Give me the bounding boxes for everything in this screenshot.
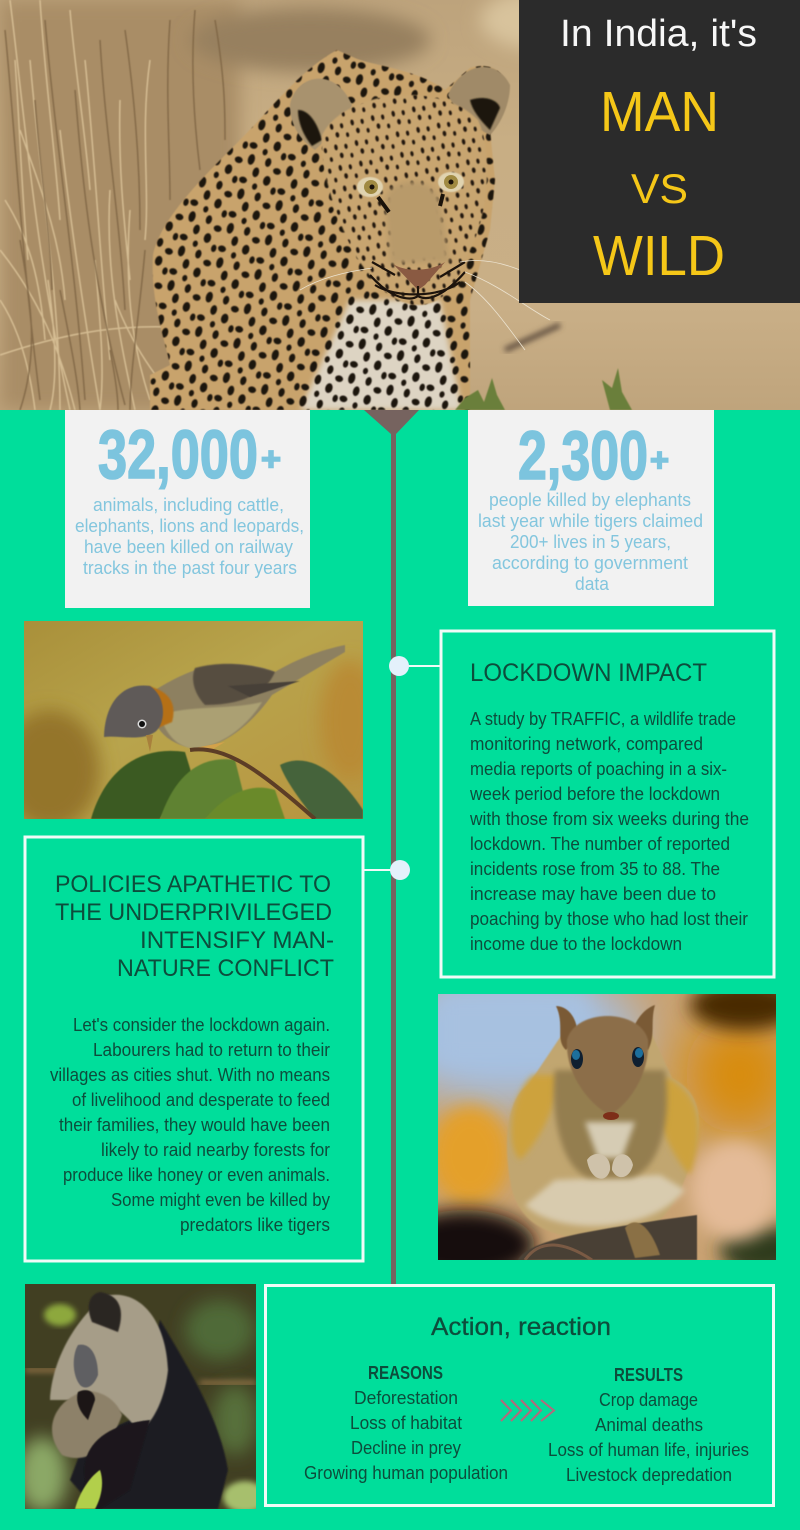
column: reasons: Decline in prey — [351, 1438, 461, 1458]
body text: Some might even be killed by — [111, 1190, 330, 1210]
body text: produce like honey or even animals. — [63, 1165, 330, 1185]
title: man vs wild: MAN — [600, 80, 719, 144]
stat description: people killed by elephants — [489, 489, 691, 510]
body text: monitoring network, compared — [470, 734, 703, 754]
stat description — [75, 494, 304, 578]
stat card: animals — [65, 410, 310, 608]
connector and dot — [389, 656, 440, 676]
heading: POLICIES APATHETIC TO — [55, 871, 331, 898]
body text — [50, 1015, 330, 1235]
column: results: Animal deaths — [595, 1415, 703, 1435]
leopard body — [150, 50, 506, 410]
panel: lockdown impact — [389, 631, 774, 977]
stat description: have been killed on railway — [84, 536, 294, 557]
squirrel perch — [518, 1215, 697, 1260]
stat number 32,000: 32,000 — [98, 416, 258, 493]
body text: incidents rose from 35 to 88. The — [470, 859, 720, 879]
stat description: elephants, lions and leopards, — [75, 515, 304, 536]
grass — [0, 0, 161, 410]
macaque infant — [52, 1391, 122, 1458]
stat description: tracks in the past four years — [83, 557, 297, 578]
column: reasons — [304, 1363, 508, 1483]
body text: lockdown. The number of reported — [470, 834, 730, 854]
stat description: animals, including cattle, — [93, 494, 284, 515]
column: results — [548, 1365, 749, 1485]
photo: bird on leaves — [24, 621, 363, 819]
column: results: Livestock depredation — [566, 1465, 732, 1485]
column: results: Crop damage — [599, 1390, 698, 1410]
macaque body — [70, 1320, 228, 1509]
column: results: RESULTS — [614, 1365, 683, 1385]
body text: poaching by those who had lost their — [470, 909, 748, 929]
heading: THE UNDERPRIVILEGED — [55, 899, 332, 926]
heading: INTENSIFY MAN- — [140, 927, 334, 954]
leopard ears — [290, 79, 352, 150]
stat card: people — [468, 410, 714, 606]
body text: increase may have been due to — [470, 884, 716, 904]
stat number 32,000: + — [261, 441, 281, 477]
title: man vs wild: VS — [631, 165, 688, 212]
stat description: data — [575, 573, 610, 594]
body text: income due to the lockdown — [470, 934, 682, 954]
leopard head — [322, 95, 487, 305]
body text: their families, they would have been — [59, 1115, 330, 1135]
body text: likely to raid nearby forests for — [101, 1140, 330, 1160]
hero photo: leopard — [0, 0, 800, 410]
body text: with those from six weeks during the — [469, 809, 749, 829]
heading: LOCKDOWN IMPACT — [470, 659, 707, 687]
macaque mane — [50, 1295, 168, 1432]
squirrel paws — [587, 1154, 633, 1179]
panel: policies — [25, 837, 410, 1261]
column: reasons: Deforestation — [354, 1388, 458, 1408]
title panel — [519, 0, 800, 303]
title: man vs wild: WILD — [593, 224, 725, 288]
photo: lion-tailed macaque — [17, 1284, 267, 1513]
body text: villages as cities shut. With no means — [50, 1065, 330, 1085]
column: reasons: Growing human population — [304, 1463, 508, 1483]
heading — [55, 871, 334, 982]
body text: A study by TRAFFIC, a wildlife trade — [470, 709, 736, 729]
stat number 2,300: 2,300 — [518, 417, 648, 494]
arrow: chevrons — [501, 1400, 554, 1421]
photo: squirrel — [438, 994, 776, 1260]
body text: week period before the lockdown — [469, 784, 720, 804]
body text: predators like tigers — [180, 1215, 330, 1235]
heading: Action, reaction — [431, 1313, 611, 1341]
timeline spine — [364, 410, 419, 1284]
column: reasons: Loss of habitat — [350, 1413, 462, 1433]
title: in India: In India, it's — [560, 13, 757, 55]
body text: Labourers had to return to their — [93, 1040, 330, 1060]
body text: of livelihood and desperate to feed — [72, 1090, 330, 1110]
stat description: last year while tigers claimed — [478, 510, 703, 531]
foliage — [455, 368, 632, 410]
body text: media reports of poaching in a six- — [470, 759, 727, 779]
stat description: according to government — [492, 552, 688, 573]
squirrel body — [507, 1030, 699, 1240]
stat number 2,300: + — [650, 442, 669, 478]
heading: NATURE CONFLICT — [117, 955, 334, 982]
column: results: Loss of human life, injuries — [548, 1440, 749, 1460]
stat description: 200+ lives in 5 years, — [510, 531, 671, 552]
squirrel ears and head — [556, 1005, 655, 1050]
connector and dot — [364, 860, 410, 880]
body text: Let's consider the lockdown again. — [73, 1015, 330, 1035]
column: reasons: REASONS — [368, 1363, 443, 1383]
stat description — [478, 489, 703, 594]
title: man vs wild — [593, 80, 725, 288]
panel: action, reaction — [266, 1286, 774, 1506]
body text — [469, 709, 749, 954]
